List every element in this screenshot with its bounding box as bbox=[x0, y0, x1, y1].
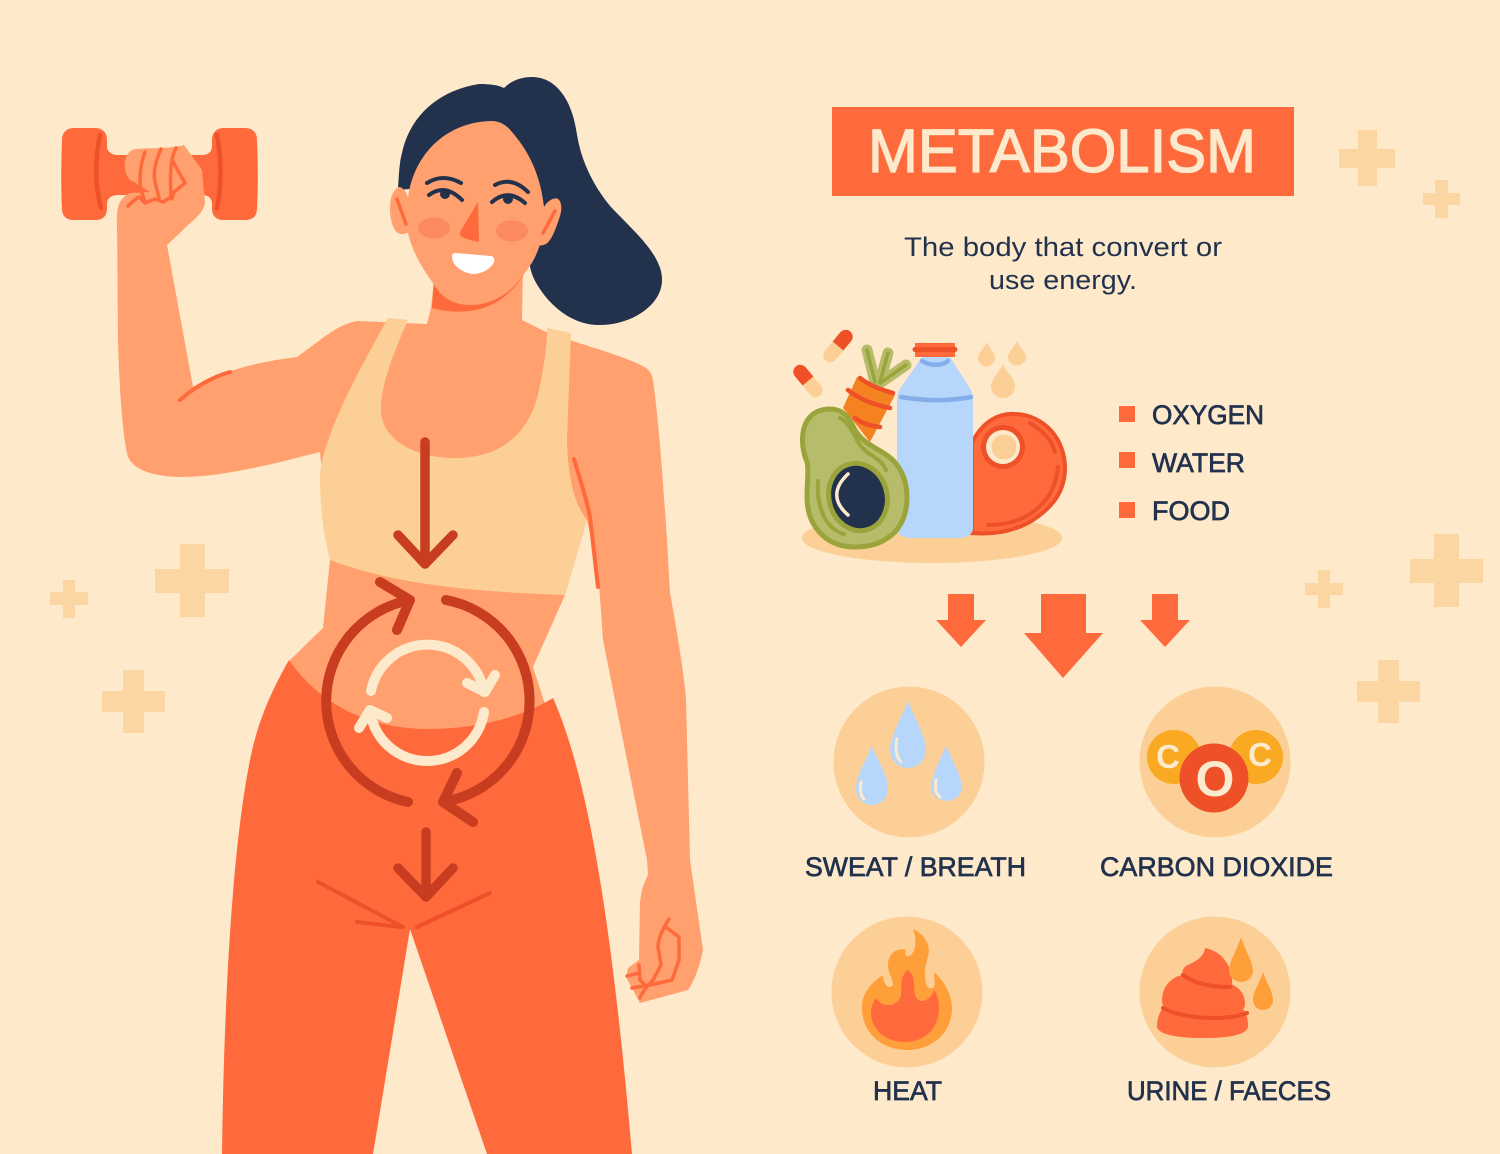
lower hand finger lines bbox=[627, 919, 679, 998]
output: urine and faeces bbox=[1127, 916, 1331, 1106]
crotch lines bbox=[318, 882, 490, 927]
water bottle bbox=[897, 343, 973, 538]
dumbbell bbox=[61, 128, 258, 220]
output: heat bbox=[832, 916, 982, 1106]
carrot bbox=[843, 350, 906, 442]
plate shadow bbox=[802, 513, 1062, 563]
output: carbon dioxide: C bbox=[1248, 736, 1272, 773]
pants bbox=[222, 660, 632, 1154]
eyes bbox=[427, 178, 528, 203]
armpit line bbox=[574, 459, 598, 587]
nose bbox=[460, 202, 479, 242]
left ear bbox=[390, 187, 409, 234]
steak bbox=[972, 414, 1065, 533]
face bbox=[408, 121, 544, 305]
pills bbox=[820, 327, 856, 365]
neck shadow bbox=[432, 270, 525, 312]
output: carbon dioxide: CARBON DIOXIDE bbox=[1100, 852, 1333, 882]
output: urine and faeces: URINE / FAECES bbox=[1127, 1076, 1331, 1106]
inputs list: OXYGEN bbox=[1152, 400, 1264, 430]
circular arrows: large bbox=[326, 582, 530, 822]
raised hand bbox=[117, 145, 205, 387]
elbow line bbox=[180, 372, 230, 400]
smile bbox=[452, 253, 494, 274]
cheeks bbox=[418, 218, 450, 238]
inputs list: FOOD bbox=[1152, 496, 1230, 526]
arrow: out of body bbox=[398, 832, 453, 897]
right ear bbox=[535, 198, 561, 246]
illustration: woman exercising bbox=[61, 77, 703, 1154]
output: sweat and breath: SWEAT / BREATH bbox=[805, 852, 1026, 882]
subtitle: use energy. bbox=[989, 265, 1137, 295]
down arrows bbox=[936, 594, 1190, 678]
title banner: METABOLISM bbox=[868, 117, 1256, 185]
output: carbon dioxide: C bbox=[1156, 738, 1180, 775]
output: carbon dioxide bbox=[1100, 686, 1333, 882]
sports bra bbox=[320, 318, 587, 595]
inputs list: WATER bbox=[1152, 448, 1245, 478]
subtitle bbox=[904, 232, 1222, 295]
food and water illustration bbox=[790, 327, 1065, 563]
body skin bbox=[117, 217, 703, 1003]
small drops bbox=[978, 341, 1026, 398]
output: heat: HEAT bbox=[873, 1076, 942, 1106]
ear lines bbox=[397, 199, 555, 233]
output: sweat and breath bbox=[805, 686, 1026, 882]
circular arrows: small bbox=[359, 645, 495, 761]
hair bbox=[398, 77, 662, 325]
arrow: into body bbox=[398, 442, 453, 564]
inputs list bbox=[1119, 400, 1264, 526]
title banner bbox=[832, 107, 1294, 196]
avocado bbox=[802, 409, 907, 547]
decorative plus signs bbox=[50, 130, 1483, 733]
subtitle: The body that convert or bbox=[904, 232, 1222, 262]
output: carbon dioxide: O bbox=[1196, 751, 1234, 807]
